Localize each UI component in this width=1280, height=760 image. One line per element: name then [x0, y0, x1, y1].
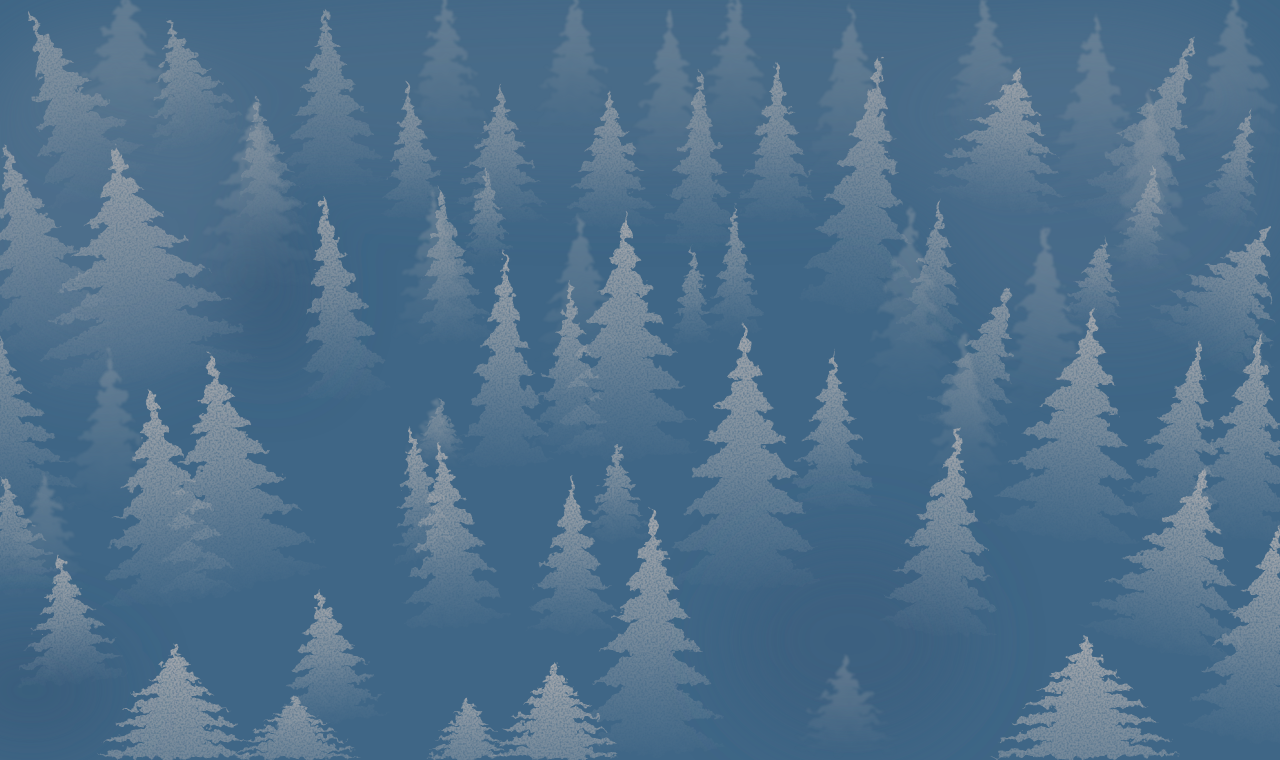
tree layer: bright foreground trees: [0, 212, 1280, 760]
tree layer: mid-ground upper canopy: [0, 0, 1280, 515]
